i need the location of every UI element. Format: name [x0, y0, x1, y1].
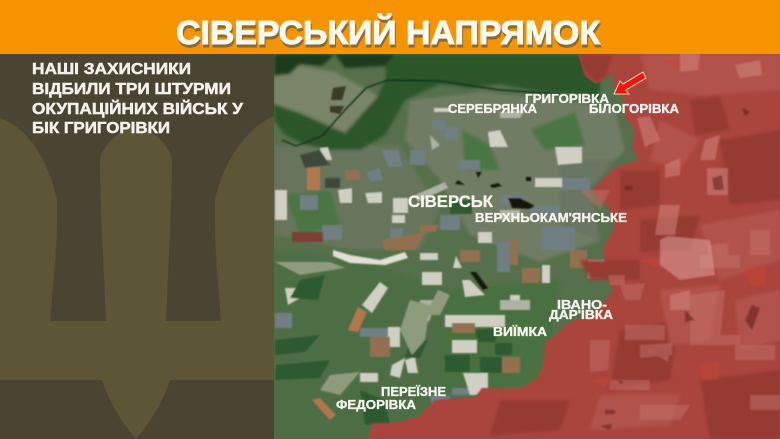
- title: СІВЕРСЬКИЙ НАПРЯМОК: [177, 16, 602, 54]
- label: Bilohorivka: БІЛОГОРІВКА: [589, 102, 679, 116]
- label: Verkhnokamianske: ВЕРХНЬОКАМ'ЯНСЬКЕ: [475, 211, 627, 225]
- text: summary: БІК ГРИГОРІВКИ: [32, 120, 170, 137]
- forest band: [274, 54, 600, 150]
- label: Fedorivka: ФЕДОРІВКА: [336, 398, 416, 412]
- arrow: red arrow pointing to Hryhorivka: [614, 72, 646, 94]
- text: summary: ОКУПАЦІЙНИХ ВІЙСЬК У: [32, 99, 244, 118]
- left panel: [0, 54, 274, 439]
- label: Hryhorivka: ГРИГОРІВКА: [525, 92, 609, 106]
- fields: brown: [345, 170, 587, 373]
- fields: dark green: [275, 200, 512, 425]
- red zone field patches: [490, 54, 780, 439]
- winding river: [282, 80, 560, 146]
- icon: trident emblem: [0, 116, 274, 439]
- text: summary: НАШІ ЗАХИСНИКИ: [32, 61, 191, 78]
- label: Ivano-Darivka: [549, 298, 613, 322]
- text: summary: [32, 61, 244, 137]
- text: summary: ВІДБИЛИ ТРИ ШТУРМИ: [32, 81, 231, 98]
- label: Ivano-Darivka: ДАР'ІВКА: [549, 308, 613, 322]
- label: Serebrianka: СЕРЕБРЯНКА: [448, 102, 537, 116]
- red occupied zone: [368, 54, 780, 439]
- label: Siversk: СІВЕРСЬК: [408, 192, 494, 211]
- label: Ivano-Darivka: ІВАНО-: [557, 298, 607, 312]
- map labels: [336, 92, 679, 412]
- ground tones: [274, 66, 378, 132]
- label: Vyimka: ВИЇМКА: [493, 324, 547, 339]
- map: [274, 54, 780, 439]
- water: [455, 172, 535, 290]
- fields: white: [275, 108, 605, 395]
- title: СІВЕРСЬКИЙ НАПРЯМОК: [176, 13, 601, 51]
- header bar: [0, 0, 780, 54]
- fields: grey: [275, 120, 590, 410]
- label: Pereizne: ПЕРЕЇЗНЕ: [381, 384, 446, 399]
